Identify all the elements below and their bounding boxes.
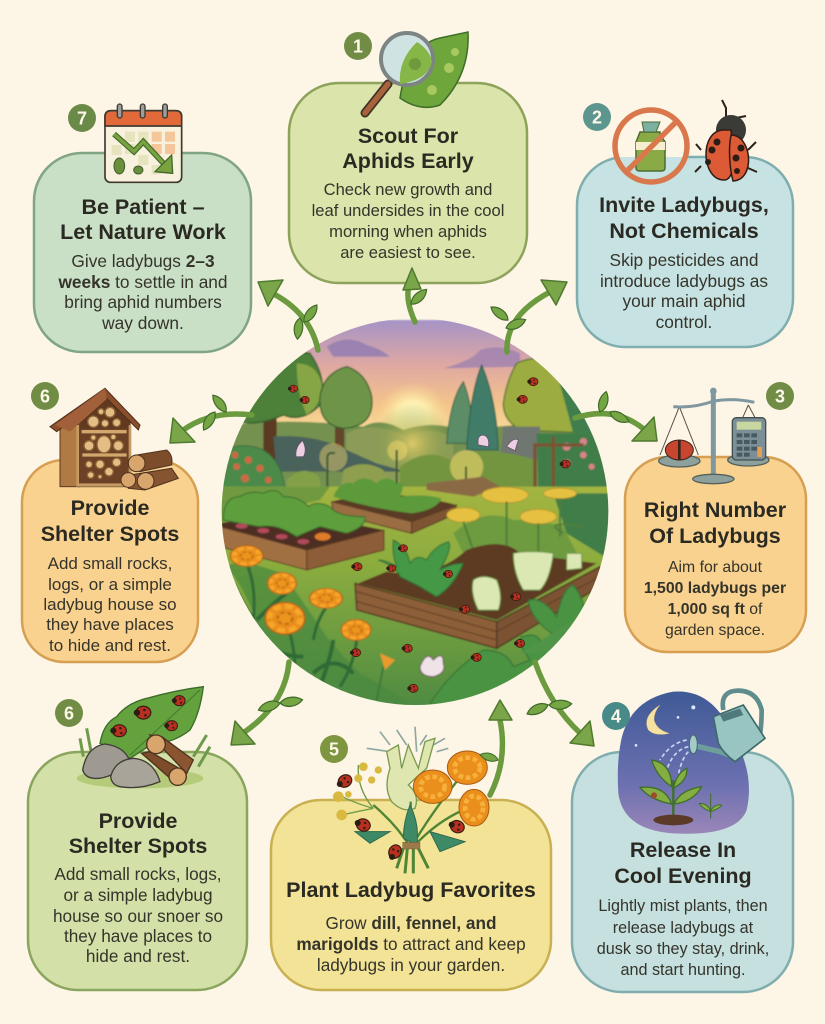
body text: morning when aphids [329,222,487,241]
body text: or a simple ladybug [63,885,213,905]
badge: 4 [602,702,630,730]
body text: way down. [101,313,184,333]
heading: Right Number [644,498,787,522]
body text: ladybugs in your garden. [317,955,505,975]
body text: they have places to [64,926,212,946]
panel: step 3 right number [625,382,806,652]
heading: Of Ladybugs [649,524,781,548]
body text: to attract and keep [383,934,526,954]
heading: Be Patient – [81,195,205,219]
arrow: to lower shelter step [231,662,303,745]
badge: 2: 2 [592,108,602,128]
arrow: to step 4 [526,662,594,746]
body text: Give ladybugs 2–3 [71,251,215,271]
panel: step 5 plant ladybug favorites [271,727,551,990]
heading: Provide [99,809,177,833]
badge: 3: 3 [775,386,785,406]
icon: magnifying glass over leaf [365,32,468,113]
heading: Shelter Spots [69,834,207,858]
body text: of [749,601,762,618]
badge: 6 [55,699,83,727]
body text: 1,000 sq ft [668,601,746,618]
central garden illustration [220,320,610,710]
body text: weeks [57,272,110,292]
badge: 6: 6 [40,386,50,406]
icon: no pesticide spray [615,110,687,182]
panel: step 7 be patient [34,104,251,352]
body text: dusk so they stay, drink, [597,940,769,958]
body text: are easiest to see. [340,243,476,262]
body text: Check new growth and [324,180,492,199]
arrow: to step 1 [403,268,430,322]
heading: Let Nature Work [60,220,226,244]
heading: Shelter Spots [41,522,179,546]
icon: calendar with falling arrow [105,104,182,182]
panel: step 1 scout for aphids [289,32,527,283]
body text: they have places [46,615,174,634]
arrow: to step 7 [258,280,322,350]
icon: night watering scene [618,691,765,834]
heading: Aphids Early [342,149,474,173]
badge: 5: 5 [329,740,339,760]
panel: step 4 release in cool evening [572,691,793,992]
body text: Lightly mist plants, then [598,897,768,915]
icon: ladybug house and logs [50,388,178,490]
body text: introduce ladybugs as [600,271,768,291]
body text: Add small rocks, [48,554,172,573]
marigolds and foliage [229,544,388,690]
badge: 6: 6 [64,704,74,724]
badge: 5 [320,735,348,763]
front raised bed [355,540,600,648]
body text: your main aphid [623,291,745,311]
body text: to hide and rest. [49,636,171,655]
body text: hide and rest. [86,946,190,966]
arrow: to step 5 [479,700,512,795]
arrow: to step 3 [575,391,657,441]
heading: Plant Ladybug Favorites [286,878,536,902]
body text: release ladybugs at [613,919,754,937]
badge: 4: 4 [611,706,621,726]
badge: 3 [766,382,794,410]
panel: upper shelter step [22,382,198,662]
butterflies [296,435,518,457]
icon: leaf with ladybugs, rocks and logs [77,687,210,788]
body text: bring aphid numbers [64,292,222,312]
body text: Add small rocks, logs, [54,864,222,884]
heading: Cool Evening [614,864,752,888]
body text: ladybug house so [43,595,177,614]
heading: Release In [630,838,736,862]
body text: Grow dill, fennel, and [326,913,496,933]
back raised bed [332,478,457,533]
heading: Not Chemicals [609,219,759,243]
body text: Skip pesticides and [610,250,758,270]
heading: Scout For [358,124,459,148]
ladybugs [288,378,570,692]
heading: Invite Ladybugs, [599,193,769,217]
body text: Aim for about [668,559,762,576]
body text: garden space. [665,622,765,639]
icon: balance scale with ladybugs and calculator [659,388,769,484]
body text: control. [656,312,712,332]
body text: 1,500 ladybugs per [644,580,786,597]
body text: marigolds [296,934,378,954]
heading: Provide [71,496,149,520]
body text: to settle in and [115,272,228,292]
badge: 1 [344,32,372,60]
badge: 6 [31,382,59,410]
arrow: to upper shelter step [170,392,252,443]
arrow: to step 2 [490,280,567,352]
badge: 2 [583,103,611,131]
panel: step 2 invite ladybugs [577,100,793,347]
dill flowers [453,515,576,560]
icon: bouquet of dill, fennel and marigolds [333,727,489,873]
body text: logs, or a simple [48,575,172,594]
badge: 1: 1 [353,36,363,56]
badge: 7: 7 [77,108,87,128]
body text: and start hunting. [620,961,746,979]
badge: 7 [68,104,96,132]
left raised bed [220,491,384,570]
foreground leaves and blossoms [376,584,584,704]
icon: ladybug [695,100,757,181]
body text: leaf undersides in the cool [312,201,504,220]
panel: lower shelter step [28,687,247,990]
body text: house so our snoer so [53,906,223,926]
